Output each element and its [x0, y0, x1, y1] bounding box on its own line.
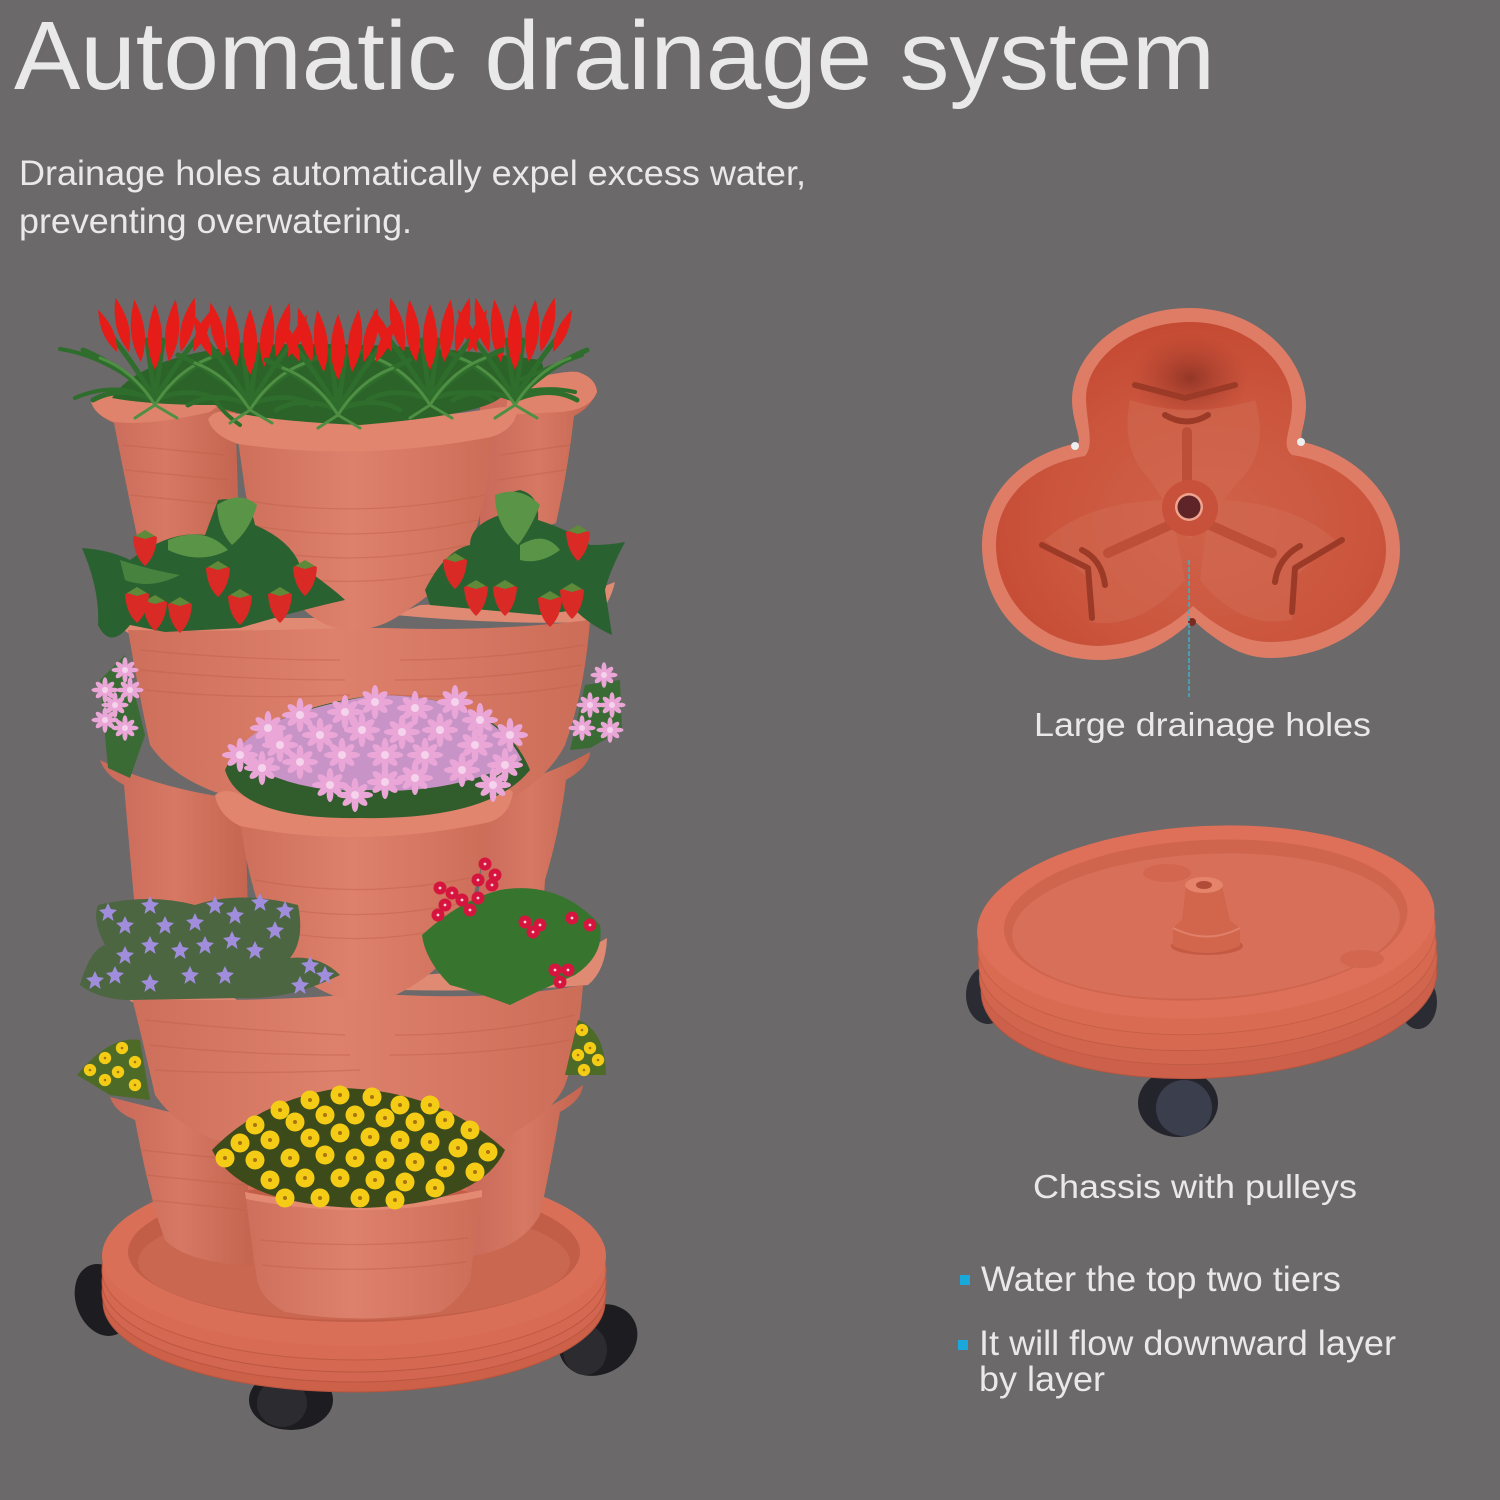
purple flowers — [80, 893, 340, 1000]
strawberry plant left — [82, 498, 345, 638]
tier 4 body — [132, 985, 583, 1160]
bullet 2 — [958, 1324, 1396, 1399]
intro text: Drainage holes automatically expel excess water, — [19, 154, 806, 193]
tier 5 back pots — [110, 1085, 583, 1266]
intro text — [19, 154, 806, 241]
tray dimples — [1143, 864, 1384, 968]
tier 5 front pot — [245, 1190, 482, 1318]
red verbena — [422, 858, 601, 1005]
pink flowers side clusters — [92, 655, 626, 778]
label: large drainage holes: Large drainage holes — [1034, 706, 1371, 743]
red bromeliad plants — [60, 296, 587, 428]
pink flowers front — [222, 685, 530, 818]
tier 3 front pot — [215, 790, 513, 1000]
stacked planter tower — [60, 296, 651, 1430]
tier 2 body — [128, 620, 590, 830]
tier 1 back pots — [91, 372, 597, 560]
front wheel — [1138, 1069, 1218, 1137]
centre cone — [1171, 877, 1243, 955]
yellow flowers side clusters — [77, 1020, 606, 1100]
foliage base — [112, 344, 543, 425]
tier 2 rims — [100, 582, 615, 634]
tray — [102, 1166, 606, 1392]
drainage hole — [1162, 480, 1218, 536]
chassis with pulleys — [966, 814, 1443, 1137]
lobe supports — [1042, 385, 1342, 618]
inner floor lobes — [1045, 400, 1335, 623]
tier 3 back pots — [100, 752, 590, 990]
bullet list — [958, 1260, 1396, 1399]
leader line — [1188, 560, 1190, 697]
label: chassis with pulleys: Chassis with pulleys — [1033, 1168, 1357, 1205]
title: Automatic drainage system — [14, 1, 1215, 110]
bullet 2: by layer — [979, 1360, 1105, 1399]
tier 1 front pot — [208, 407, 517, 630]
bullet 1: Water the top two tiers — [981, 1260, 1341, 1299]
strawberry plant right — [425, 490, 625, 635]
outer leaves — [60, 349, 582, 425]
side wheels — [966, 966, 1437, 1029]
central drain ribs — [1108, 432, 1272, 553]
bullet 2: It will flow downward layer — [979, 1324, 1396, 1363]
pot ribbing — [122, 445, 585, 1269]
tray wheels — [65, 1256, 651, 1430]
trefoil pot top view — [982, 308, 1400, 660]
tier 4 rims — [105, 938, 607, 1002]
intro text: preventing overwatering. — [19, 202, 412, 241]
tray body bands — [972, 814, 1443, 1090]
yellow flowers front — [212, 1086, 505, 1210]
